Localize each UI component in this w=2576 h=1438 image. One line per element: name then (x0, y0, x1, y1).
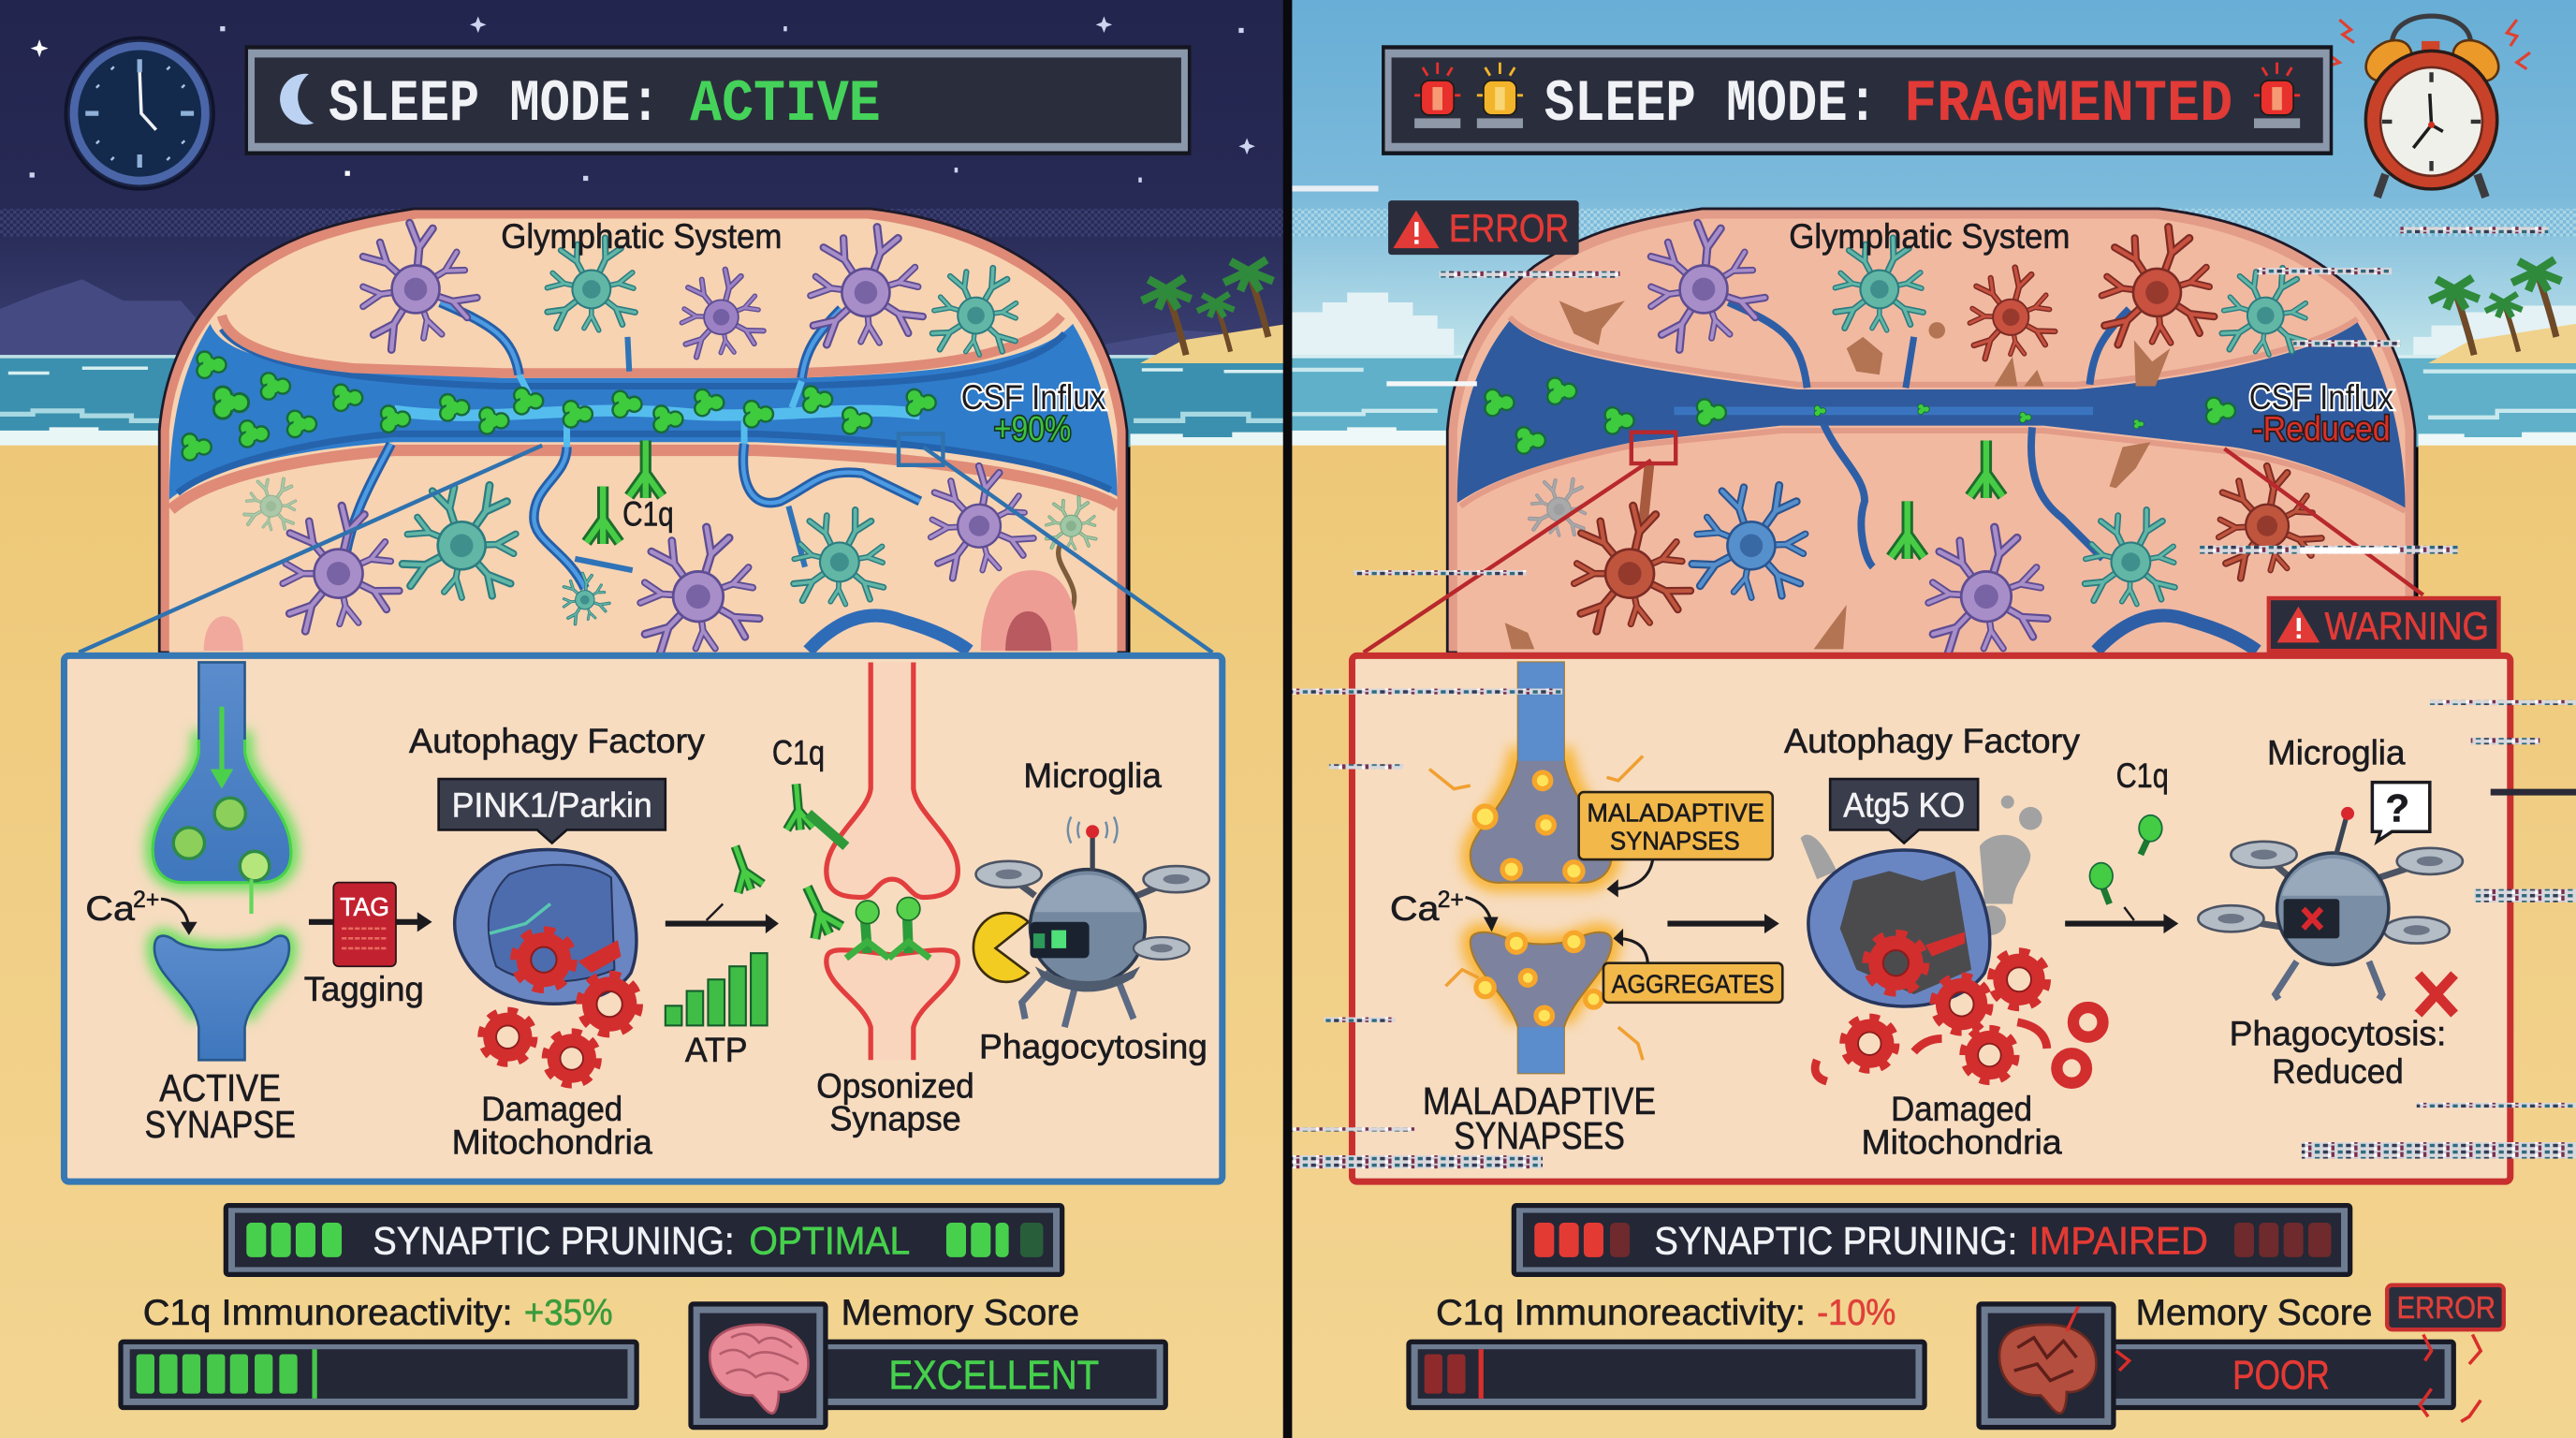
C1q immunoreactivity metric: C1q Immunoreactivity: (143, 1293, 513, 1333)
header text: FRAGMENTED (1904, 70, 2232, 138)
blue vessel arc (2097, 616, 2258, 651)
memory score metric (688, 1293, 1168, 1430)
memory score metric (1976, 1285, 2504, 1430)
memory score metric: Memory Score (2136, 1293, 2372, 1333)
opsonized synapse label (816, 1067, 974, 1138)
microglia label: Microglia (2267, 733, 2406, 771)
brown plaque smudges (1505, 301, 2170, 649)
header text: SLEEP MODE: (1544, 70, 1878, 138)
panel: right side, sleep mode fragmented (1283, 0, 2576, 1438)
header text: ACTIVE (690, 70, 881, 138)
zoom indicator lines (1364, 433, 2423, 653)
callout: aggregates (1603, 929, 1782, 1003)
error badge (1388, 200, 1579, 255)
night sky background (0, 0, 1288, 359)
active synapse label: ACTIVE (159, 1066, 281, 1109)
opsonized synapse (783, 662, 958, 1060)
opsonized synapse label: Opsonized (816, 1067, 974, 1106)
icon: moon (280, 74, 314, 125)
wall clock (66, 37, 213, 189)
island with palm trees (2428, 259, 2576, 363)
phagocytosing label: Phagocytosing (979, 1027, 1208, 1065)
error tag: ERROR (2397, 1291, 2496, 1326)
icon: red siren (1414, 63, 1460, 128)
status bar: synaptic pruning optimal (224, 1203, 1064, 1277)
center divider (1283, 0, 1292, 1438)
error badge: ERROR (1449, 206, 1569, 250)
tag icon with arrow: TAG (340, 892, 389, 921)
error tag (2387, 1285, 2504, 1329)
glitch noise strips (1292, 185, 2576, 1168)
maladaptive synapses (1429, 662, 1643, 1073)
broken mitochondrion (1808, 850, 2103, 1083)
active synapse label (144, 1066, 296, 1146)
CSF influx label (2249, 378, 2394, 448)
C1q immunoreactivity metric: C1q Immunoreactivity: (1436, 1293, 1806, 1333)
neurons (236, 214, 1107, 672)
CSF influx label: -Reduced (2252, 409, 2391, 448)
Ca2+ label: 2+ (1438, 888, 1464, 913)
header: sleep mode active (245, 45, 1191, 155)
neurons (1520, 214, 2329, 672)
C1q immunoreactivity metric (1406, 1293, 1927, 1410)
damaged mitochondria label (452, 1090, 652, 1161)
arrow with C1q fragments (2065, 815, 2178, 933)
Ca2+ label: Ca (85, 889, 135, 928)
axons (345, 302, 970, 651)
tag icon with arrow (309, 883, 432, 966)
speech bubble: ? (2385, 786, 2409, 830)
memory score metric: EXCELLENT (889, 1352, 1099, 1398)
phagocytosis reduced label (2230, 1014, 2446, 1091)
malfunctioning robot (2198, 807, 2463, 999)
CSF influx label: CSF Influx (961, 378, 1106, 417)
status bar: synaptic pruning optimal: OPTIMAL (749, 1218, 910, 1262)
C1q antibodies (587, 440, 674, 544)
arrow with C1q antibody (666, 842, 779, 933)
phagocytosis reduced label: Reduced (2272, 1052, 2404, 1091)
active synapse (153, 662, 291, 1060)
status bar: synaptic pruning impaired: IMPAIRED (2029, 1218, 2208, 1262)
damaged mitochondria label: Mitochondria (1862, 1123, 2062, 1161)
brain dome cross-section (1447, 209, 2415, 672)
callout: maladaptive synapses (1579, 792, 1773, 897)
Ca2+ label (1390, 888, 1499, 932)
icon: yellow siren (1477, 63, 1523, 128)
axons (1728, 302, 2130, 567)
red X mark (2419, 975, 2454, 1014)
damaged mitochondrion (455, 850, 638, 1084)
C1q immunoreactivity metric: +35% (524, 1293, 613, 1333)
autophagy factory label: Autophagy Factory (1784, 722, 2081, 760)
CSF green particles (183, 351, 936, 461)
panel: inset, active synapse pathway (64, 655, 1222, 1181)
stars (30, 17, 1255, 183)
alarm clock (2326, 16, 2530, 198)
autophagy factory label: Autophagy Factory (409, 722, 706, 760)
tagging label: Tagging (304, 970, 424, 1008)
status bar: synaptic pruning impaired: SYNAPTIC PRUNING: (1654, 1218, 2017, 1262)
opsonized synapse label: Synapse (829, 1100, 961, 1138)
sand (1288, 446, 2576, 1438)
damaged mitochondria label: Damaged (1891, 1090, 2032, 1128)
CSF influx label: CSF Influx (2249, 378, 2394, 417)
header: sleep mode fragmented (1382, 45, 2333, 155)
Atg5 KO bubble (1830, 779, 1978, 844)
ATP label: ATP (685, 1031, 748, 1069)
alarm sparks (2326, 20, 2530, 69)
memory score metric: Memory Score (842, 1293, 1079, 1333)
zoom indicator lines (79, 433, 1212, 653)
warning badge: WARNING (2324, 604, 2489, 648)
icon: damaged brain (1999, 1325, 2097, 1414)
sand (0, 446, 1288, 1438)
damaged mitochondria label (1862, 1090, 2062, 1161)
damaged mitochondria label: Damaged (481, 1090, 622, 1128)
C1q label: C1q (772, 733, 825, 771)
arrow (1667, 914, 1779, 933)
phagocytosis reduced label: Phagocytosis: (2230, 1014, 2446, 1052)
PINK1/Parkin bubble: PINK1/Parkin (452, 785, 652, 824)
microglia label: Microglia (1023, 756, 1162, 795)
dome heading: Glymphatic System (501, 217, 782, 256)
damaged mitochondria label: Mitochondria (452, 1123, 652, 1161)
header text: SLEEP MODE: (329, 70, 661, 138)
C1q antibodies: C1q (622, 495, 674, 534)
warning badge (2269, 598, 2499, 651)
maladaptive synapses label (1423, 1079, 1656, 1157)
status bar: synaptic pruning optimal: SYNAPTIC PRUNING: (373, 1218, 735, 1262)
status bar: synaptic pruning impaired (1512, 1203, 2352, 1277)
C1q antibodies (1891, 440, 2002, 559)
panel: left side, sleep mode active (0, 0, 1288, 1438)
CSF green particles (1485, 378, 2235, 454)
header text (1544, 70, 2232, 138)
glitch sparks (2067, 1307, 2481, 1421)
brain dome cross-section (159, 209, 1127, 672)
sea and foam (1288, 355, 2576, 453)
ATP bars (666, 953, 768, 1025)
pink cell bodies (204, 570, 1077, 651)
dome heading: Glymphatic System (1789, 217, 2070, 256)
memory score metric: POOR (2232, 1352, 2330, 1398)
pac-man (973, 913, 1029, 982)
speech bubble (2372, 783, 2430, 842)
daytime sky background (1288, 0, 2576, 359)
CSF influx label: +90% (994, 409, 1071, 448)
icon: red siren right (2254, 63, 2300, 128)
callout: maladaptive synapses: MALADAPTIVE (1587, 799, 1764, 828)
smoke (1801, 796, 2042, 935)
callout: aggregates: AGGREGATES (1612, 969, 1775, 998)
Ca2+ label: 2+ (133, 888, 159, 913)
Ca2+ label (85, 888, 198, 935)
sea and foam (0, 355, 1288, 453)
maladaptive synapses label: SYNAPSES (1454, 1114, 1625, 1157)
glymphatic channel (1457, 317, 2405, 511)
Atg5 KO bubble: Atg5 KO (1843, 785, 1965, 824)
maladaptive synapses label: MALADAPTIVE (1423, 1079, 1656, 1123)
glymphatic channel (169, 315, 1117, 509)
C1q immunoreactivity metric: -10% (1817, 1293, 1895, 1333)
C1q immunoreactivity metric (118, 1293, 639, 1410)
CSF influx label (961, 378, 1106, 448)
PINK1/Parkin bubble (439, 779, 666, 844)
microglia robot (976, 816, 1209, 1027)
C1q label: C1q (2116, 756, 2169, 795)
Ca2+ label: Ca (1390, 889, 1440, 928)
active synapse label: SYNAPSE (144, 1103, 296, 1146)
callout: maladaptive synapses: SYNAPSES (1610, 827, 1740, 856)
icon: healthy brain (710, 1325, 809, 1414)
panel: inset, maladaptive synapse pathway (1352, 655, 2510, 1181)
island with palm trees (1140, 259, 1288, 363)
